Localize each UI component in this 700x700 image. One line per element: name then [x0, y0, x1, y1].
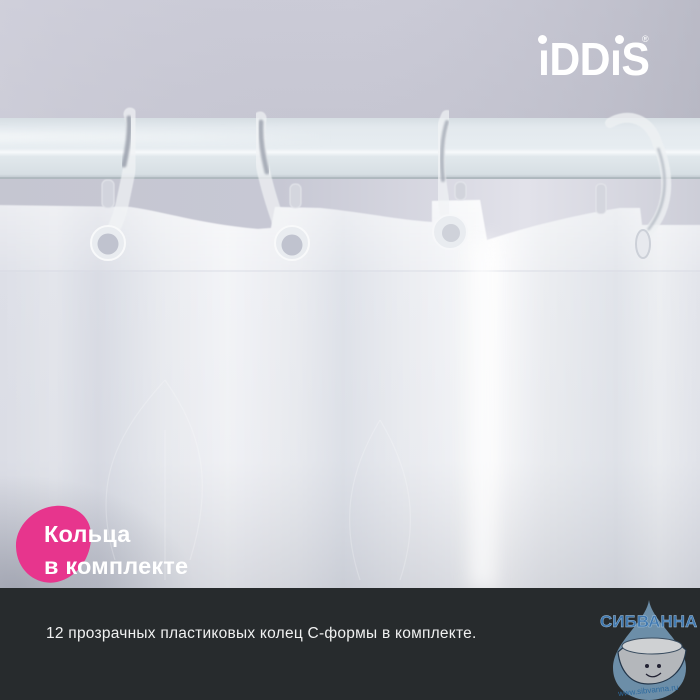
watermark logo: Сиб ванна [600, 600, 698, 700]
watermark url: www.sibvanna.ru [618, 683, 679, 698]
watermark name: СИБВАННА [600, 612, 697, 631]
wall above rod [0, 0, 700, 125]
icon: water drop with bathtub [613, 600, 686, 700]
badge: pink blob with heading [16, 506, 188, 583]
ring 2 [259, 118, 309, 260]
ring 3 [433, 116, 467, 249]
ring 1 [91, 114, 133, 260]
caption text: 12 прозрачных пластиковых колец С-формы в комплекте. [46, 625, 477, 642]
logo: IDDIS: ® [642, 34, 649, 44]
wall below rod [0, 175, 700, 260]
curtain leaf pattern [106, 380, 410, 580]
curtain rod [0, 118, 700, 179]
heading [44, 521, 188, 579]
heading: Кольца [44, 521, 130, 547]
curtain fabric [0, 200, 700, 600]
logo: IDDIS: ıDDıS [538, 33, 649, 85]
ring 4 [596, 118, 666, 258]
heading: в комплекте [44, 553, 188, 579]
pink blob [16, 506, 91, 583]
bottom caption band [0, 588, 700, 700]
